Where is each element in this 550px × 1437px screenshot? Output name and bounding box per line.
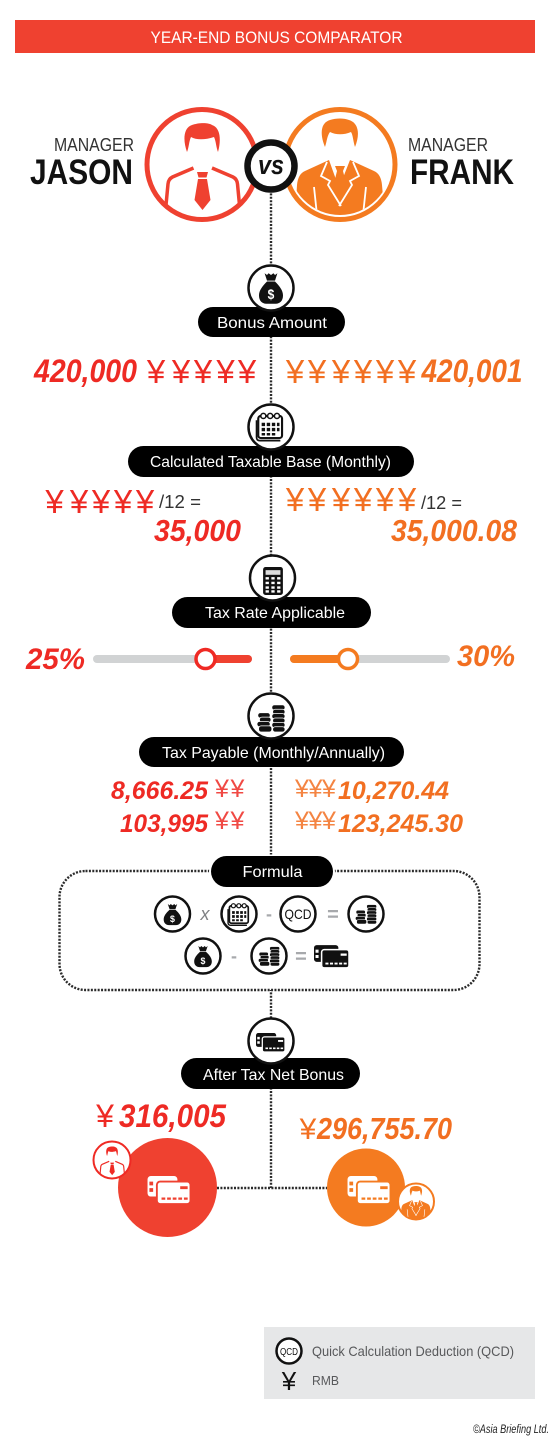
Frank tax rate slider: 30% bbox=[457, 640, 515, 673]
formula heading bbox=[209, 854, 335, 888]
formula heading: Formula bbox=[242, 864, 303, 881]
section: bonus amount heading: Bonus Amount bbox=[217, 315, 328, 332]
Frank bonus amount: 420,001 bbox=[421, 353, 522, 389]
section: taxable base heading: Calculated Taxable Base (Monthly) bbox=[150, 454, 391, 471]
Jason net bonus: 316,005 bbox=[119, 1098, 227, 1134]
Frank net bonus bbox=[299, 1111, 452, 1226]
Frank bonus amount: ¥¥¥¥¥¥ bbox=[285, 353, 417, 390]
section: taxable base heading bbox=[128, 404, 414, 477]
Jason tax payable bbox=[111, 775, 245, 838]
net bonus connector bbox=[217, 1187, 327, 1189]
Frank tax payable: ¥¥¥ bbox=[294, 775, 336, 803]
formula row: net bonus: = bbox=[295, 946, 307, 968]
Jason bonus amount: 420,000 bbox=[33, 353, 137, 389]
Jason tax rate slider: 25% bbox=[25, 643, 85, 676]
Frank net bonus: ¥ bbox=[299, 1113, 317, 1146]
Frank tax payable bbox=[294, 775, 463, 838]
icon: calendar bbox=[248, 404, 294, 450]
section: tax rate heading: Tax Rate Applicable bbox=[205, 605, 345, 622]
formula row: net bonus: - bbox=[231, 946, 237, 966]
icon: Jason avatar bbox=[94, 1142, 130, 1178]
Frank taxable base: 35,000.08 bbox=[391, 513, 518, 548]
Frank bonus amount bbox=[285, 353, 522, 390]
Jason taxable base: ¥¥¥¥¥ bbox=[44, 483, 155, 520]
title banner bbox=[15, 20, 535, 53]
icon: bank cards bbox=[248, 1018, 294, 1064]
Jason tax payable: ¥¥ bbox=[214, 775, 245, 803]
icon: money bag bbox=[248, 266, 294, 310]
Frank tax payable: 10,270.44 bbox=[338, 777, 449, 805]
manager Jason heading: JASON bbox=[30, 153, 133, 192]
icon: calculator bbox=[250, 556, 295, 600]
manager Frank heading bbox=[408, 135, 514, 192]
Frank tax payable: ¥¥¥ bbox=[294, 807, 336, 835]
icon: versus badge: vs bbox=[258, 150, 284, 180]
section: net bonus heading bbox=[181, 1018, 360, 1089]
manager Jason heading: MANAGER bbox=[54, 135, 134, 155]
Jason bonus amount: ¥¥¥¥¥ bbox=[146, 353, 257, 390]
Frank net bonus: 296,755.70 bbox=[316, 1111, 452, 1146]
section: tax payable heading: Tax Payable (Monthly/Annually) bbox=[162, 745, 385, 762]
Jason taxable base: 35,000 bbox=[154, 513, 241, 548]
section: tax rate heading bbox=[172, 556, 371, 628]
Frank taxable base: ¥¥¥¥¥¥ bbox=[285, 481, 417, 518]
legend item: RMB: ¥ bbox=[281, 1366, 297, 1396]
Jason taxable base: /12 = bbox=[159, 492, 201, 512]
Frank tax payable: 123,245.30 bbox=[338, 810, 463, 838]
icon: Jason portrait bbox=[147, 110, 257, 220]
formula row: tax payable: = bbox=[327, 904, 339, 926]
Jason tax payable: 8,666.25 bbox=[111, 777, 209, 805]
Jason net bonus: ¥ bbox=[95, 1098, 114, 1134]
Jason tax rate slider bbox=[25, 643, 252, 676]
legend item: RMB: RMB bbox=[312, 1373, 339, 1388]
section: bonus amount heading bbox=[198, 266, 345, 337]
formula row: tax payable bbox=[155, 896, 384, 932]
central dotted connector bbox=[270, 190, 272, 1188]
panel: formula bbox=[60, 854, 480, 990]
formula row: net bonus bbox=[186, 938, 349, 974]
legend item: RMB bbox=[281, 1366, 339, 1396]
formula row: tax payable: QCD bbox=[284, 906, 312, 922]
legend item: QCD bbox=[276, 1338, 514, 1364]
icon: versus badge bbox=[248, 142, 294, 190]
Jason tax payable: ¥¥ bbox=[214, 807, 245, 835]
section: net bonus heading: After Tax Net Bonus bbox=[203, 1067, 344, 1084]
formula row: tax payable: x bbox=[200, 904, 210, 924]
icon: coin stacks bbox=[248, 694, 294, 738]
manager Jason heading bbox=[30, 135, 134, 192]
legend item: QCD: QCD bbox=[280, 1347, 298, 1358]
legend item: QCD: Quick Calculation Deduction (QCD) bbox=[312, 1343, 514, 1359]
formula row: tax payable: - bbox=[266, 904, 272, 924]
Jason taxable base bbox=[44, 483, 241, 548]
Frank taxable base bbox=[285, 481, 518, 548]
icon: Frank portrait bbox=[285, 110, 395, 220]
manager Frank heading: FRANK bbox=[410, 153, 514, 192]
manager Frank heading: MANAGER bbox=[408, 135, 488, 155]
Frank tax rate slider bbox=[290, 640, 515, 673]
Jason net bonus bbox=[94, 1098, 227, 1237]
Jason tax payable: 103,995 bbox=[120, 810, 209, 838]
Frank taxable base: /12 = bbox=[421, 493, 462, 513]
section: tax payable heading bbox=[139, 694, 404, 767]
panel: legend bbox=[264, 1327, 535, 1399]
Jason bonus amount bbox=[33, 353, 257, 390]
title banner: YEAR-END BONUS COMPARATOR bbox=[150, 28, 402, 47]
icon: Frank avatar bbox=[398, 1184, 434, 1220]
